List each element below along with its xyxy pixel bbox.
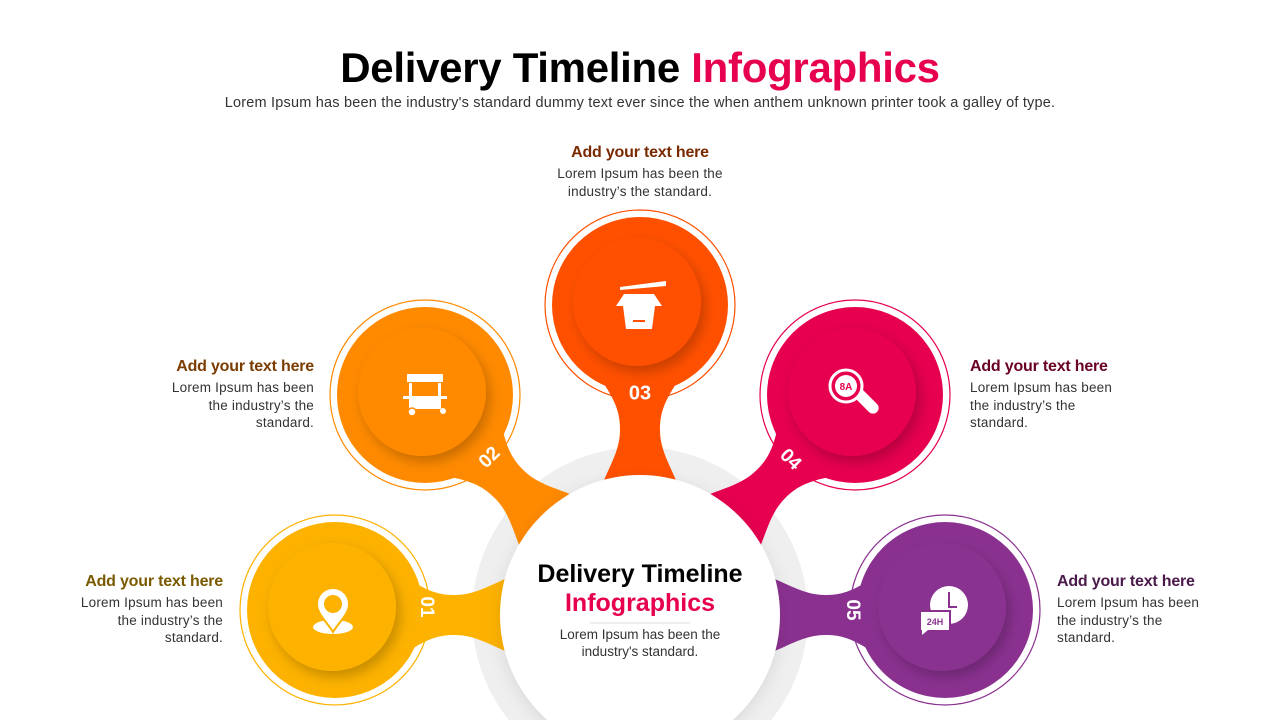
text: step 02: Lorem Ipsum has been — [172, 380, 314, 395]
icon: food cart — [403, 374, 447, 416]
text: step 02 — [172, 358, 314, 430]
icon: 24h clock — [920, 586, 968, 635]
text: step 01: Add your text here — [85, 573, 223, 590]
text: step 02: the industry’s the — [209, 398, 314, 412]
center grey ring — [472, 447, 808, 720]
center text: industry's standard. — [582, 644, 698, 659]
text: step 05: Add your text here — [1057, 573, 1195, 590]
title: Delivery Timeline Infographics — [340, 44, 940, 91]
text: step 01: Lorem Ipsum has been — [81, 595, 223, 610]
bubble 02 — [330, 300, 520, 490]
text: step 03 — [557, 144, 723, 199]
text: step 04: Add your text here — [970, 358, 1108, 375]
text: step 03: Add your text here — [571, 144, 709, 161]
icon: magnifier: 8A — [840, 382, 852, 393]
text: step 04: the industry’s the — [970, 398, 1075, 412]
bubble 01 — [240, 515, 437, 705]
bubble 04: 04 — [775, 445, 806, 475]
text: step 04: Lorem Ipsum has been — [970, 380, 1112, 395]
text: step 03: Lorem Ipsum has been the — [557, 166, 723, 181]
text: step 04: standard. — [970, 415, 1028, 430]
center text: Delivery Timeline — [537, 560, 743, 588]
text: step 01: standard. — [165, 630, 223, 645]
text: step 04 — [970, 358, 1112, 430]
bubble 02: 02 — [475, 443, 505, 473]
icon: 24h clock: 24H — [927, 617, 943, 627]
icon: noodle box — [616, 281, 666, 329]
subtitle: Lorem Ipsum has been the industry's standard dummy text ever since the when anthem unknown printer took a galley of type. — [225, 95, 1055, 111]
center text — [537, 560, 743, 659]
bubble 04 — [760, 300, 950, 490]
text: step 01 — [81, 573, 223, 645]
bubble 05 — [842, 515, 1040, 705]
text: step 05: Lorem Ipsum has been — [1057, 595, 1199, 610]
center text: Infographics — [565, 589, 715, 617]
text: step 05: the industry’s the — [1057, 612, 1162, 628]
bubble 05: 05 — [842, 599, 863, 621]
text: step 03: industry’s the standard. — [568, 184, 712, 198]
stems — [390, 365, 890, 665]
icon: magnifier — [830, 370, 879, 414]
text: step 01: the industry’s the — [118, 612, 223, 628]
bubble 01: 01 — [416, 596, 437, 618]
center text: Lorem Ipsum has been the — [560, 627, 720, 642]
text: step 02: standard. — [256, 415, 314, 430]
center white circle — [500, 475, 780, 720]
text: step 05: standard. — [1057, 630, 1115, 645]
bubble 03 — [545, 210, 735, 404]
text: step 05 — [1057, 573, 1199, 645]
text: step 02: Add your text here — [176, 358, 314, 375]
icon: location pin — [313, 588, 353, 634]
bubble 03: 03 — [629, 382, 651, 404]
